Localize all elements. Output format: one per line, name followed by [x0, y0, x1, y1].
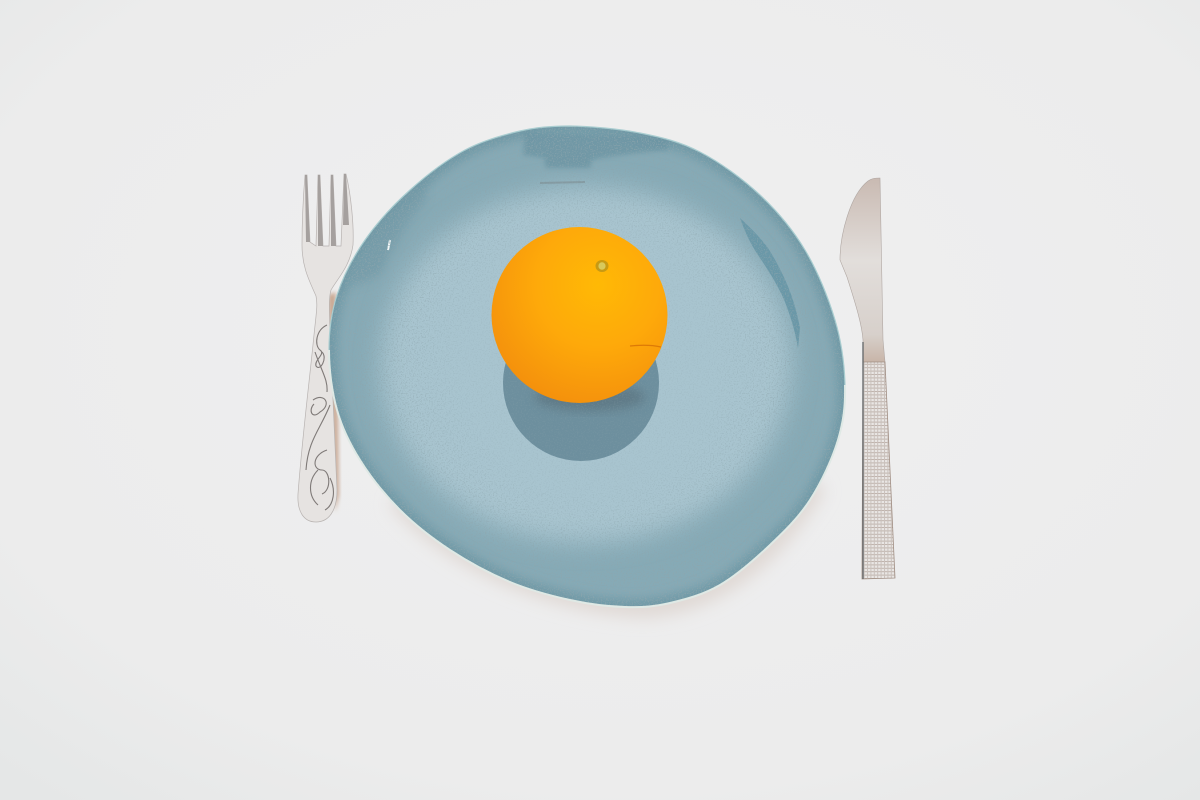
- glare and faint mark: [388, 240, 390, 250]
- fork: [298, 174, 353, 522]
- glaze reflection top: [523, 132, 668, 168]
- plate top edge: [329, 126, 845, 385]
- glaze reflection right: [740, 218, 800, 348]
- orange cast shadow on plate: [503, 360, 659, 461]
- orange stem: [596, 260, 608, 272]
- knife: [840, 178, 895, 579]
- orange crease: [630, 345, 661, 347]
- orange: [492, 227, 668, 403]
- photo scene: orange on a blue plate with fork and knife: [298, 125, 896, 620]
- plate shadow: [390, 470, 825, 618]
- speckles: [320, 120, 860, 620]
- knife handle dark edge: [862, 342, 864, 579]
- plate inner well: [380, 187, 792, 543]
- contact shadow: [535, 383, 645, 411]
- glaze reflection left: [356, 195, 424, 282]
- fork handle engraving: [306, 325, 333, 510]
- plate rim dark band: [329, 126, 845, 607]
- knife textured handle: [862, 362, 895, 579]
- plate: [320, 120, 860, 620]
- plate edge highlight: [329, 350, 845, 607]
- fork tines and head: [298, 174, 353, 522]
- plate body: [329, 126, 845, 607]
- fork handle shadow: [328, 292, 339, 512]
- fork tine shading: [305, 174, 349, 246]
- knife blade: [840, 178, 885, 362]
